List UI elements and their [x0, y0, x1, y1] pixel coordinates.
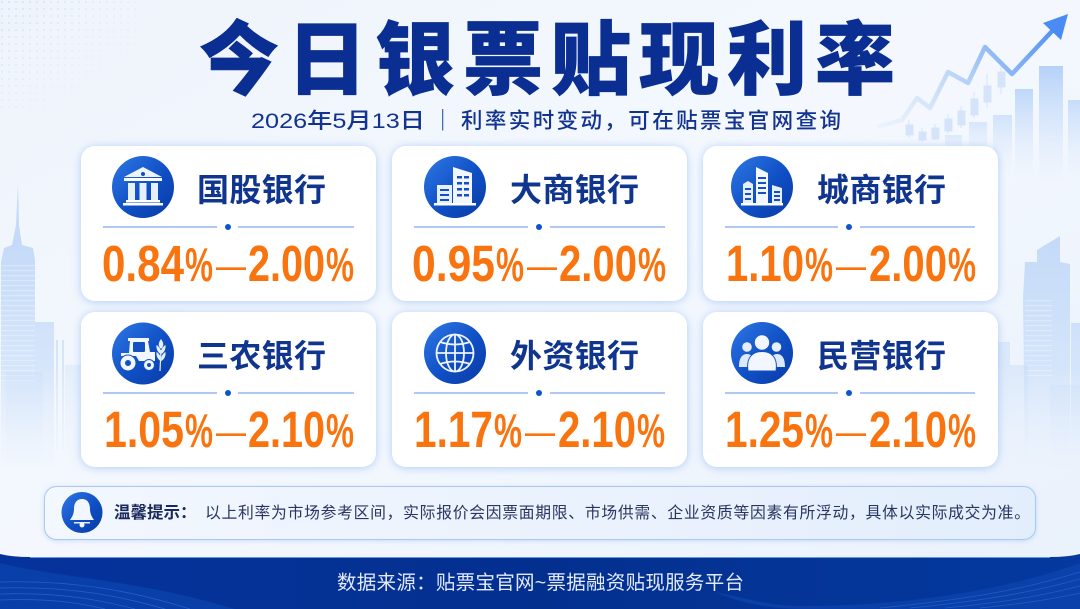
rate: %	[637, 404, 665, 457]
rate: %	[496, 238, 524, 291]
icon: bank	[112, 156, 174, 218]
rate: 1.05	[104, 401, 184, 458]
rate	[102, 235, 354, 292]
notice label: 温馨提示：	[114, 503, 196, 522]
rate	[414, 401, 665, 458]
panel: 三农银行	[81, 312, 376, 467]
card title: 大商银行	[510, 172, 639, 208]
left skyline	[1, 183, 81, 470]
rate: 2.00	[248, 235, 325, 292]
icon: bell	[62, 492, 102, 533]
card title: 三农银行	[197, 338, 326, 374]
footer text: 数据来源：贴票宝官网~票据融资贴现服务平台	[337, 572, 744, 594]
card title: 国股银行	[197, 172, 326, 208]
rate: %	[805, 238, 833, 291]
card title: 外资银行	[510, 338, 639, 374]
rate: 1.10	[726, 235, 804, 292]
panel: 大商银行	[392, 146, 687, 301]
card title: 民营银行	[817, 338, 946, 374]
growth chart with arrow	[877, 14, 1080, 186]
rate: —	[527, 244, 557, 288]
subtitle: 2026年5月13日	[251, 109, 425, 133]
panel: 民营银行	[703, 312, 998, 467]
icon: people	[731, 322, 793, 384]
rate	[104, 401, 354, 458]
rate: %	[948, 404, 976, 457]
rate: 2.00	[559, 235, 637, 292]
subtitle	[251, 109, 841, 133]
rate: 1.17	[414, 401, 493, 458]
rate: —	[836, 410, 866, 454]
right skyline	[998, 236, 1080, 470]
callout: notice	[44, 486, 1036, 540]
rate: %	[494, 404, 522, 457]
dot pattern	[0, 0, 140, 110]
panel: 外资银行	[392, 312, 687, 467]
icon: tractor and wheat	[112, 322, 174, 384]
rate: 0.84	[102, 235, 185, 292]
rate: 2.10	[248, 401, 325, 458]
rate	[412, 235, 666, 292]
rate: %	[185, 404, 213, 457]
card title: 城商银行	[817, 172, 946, 208]
rate: 1.25	[725, 401, 804, 458]
subtitle: ｜	[432, 109, 454, 133]
subtitle: 利率实时变动，可在贴票宝官网查询	[461, 109, 841, 133]
rate: %	[805, 404, 833, 457]
rate: %	[948, 238, 976, 291]
icon: office building	[424, 156, 486, 218]
rate	[726, 235, 976, 292]
rate: %	[326, 238, 354, 291]
icon: globe	[424, 322, 486, 384]
rate: %	[326, 404, 354, 457]
title: 今日银票贴现利率	[199, 16, 903, 105]
rate: —	[525, 410, 555, 454]
rate: %	[185, 238, 213, 291]
rate: 2.10	[558, 401, 636, 458]
rate: —	[216, 410, 246, 454]
notice text: 以上利率为市场参考区间，实际报价会因票面期限、市场供需、企业资质等因素有所浮动，具体以实际成交为准。	[205, 504, 1030, 522]
footer band	[0, 554, 1080, 609]
rate	[725, 401, 976, 458]
icon: city buildings	[731, 156, 793, 218]
rate: —	[836, 244, 866, 288]
panel: 国股银行	[81, 146, 376, 301]
panel: 城商银行	[703, 146, 998, 301]
rate: %	[638, 238, 666, 291]
rate: 2.00	[869, 235, 947, 292]
rate: 0.95	[412, 235, 495, 292]
rate: 2.10	[869, 401, 947, 458]
rate: —	[216, 244, 246, 288]
